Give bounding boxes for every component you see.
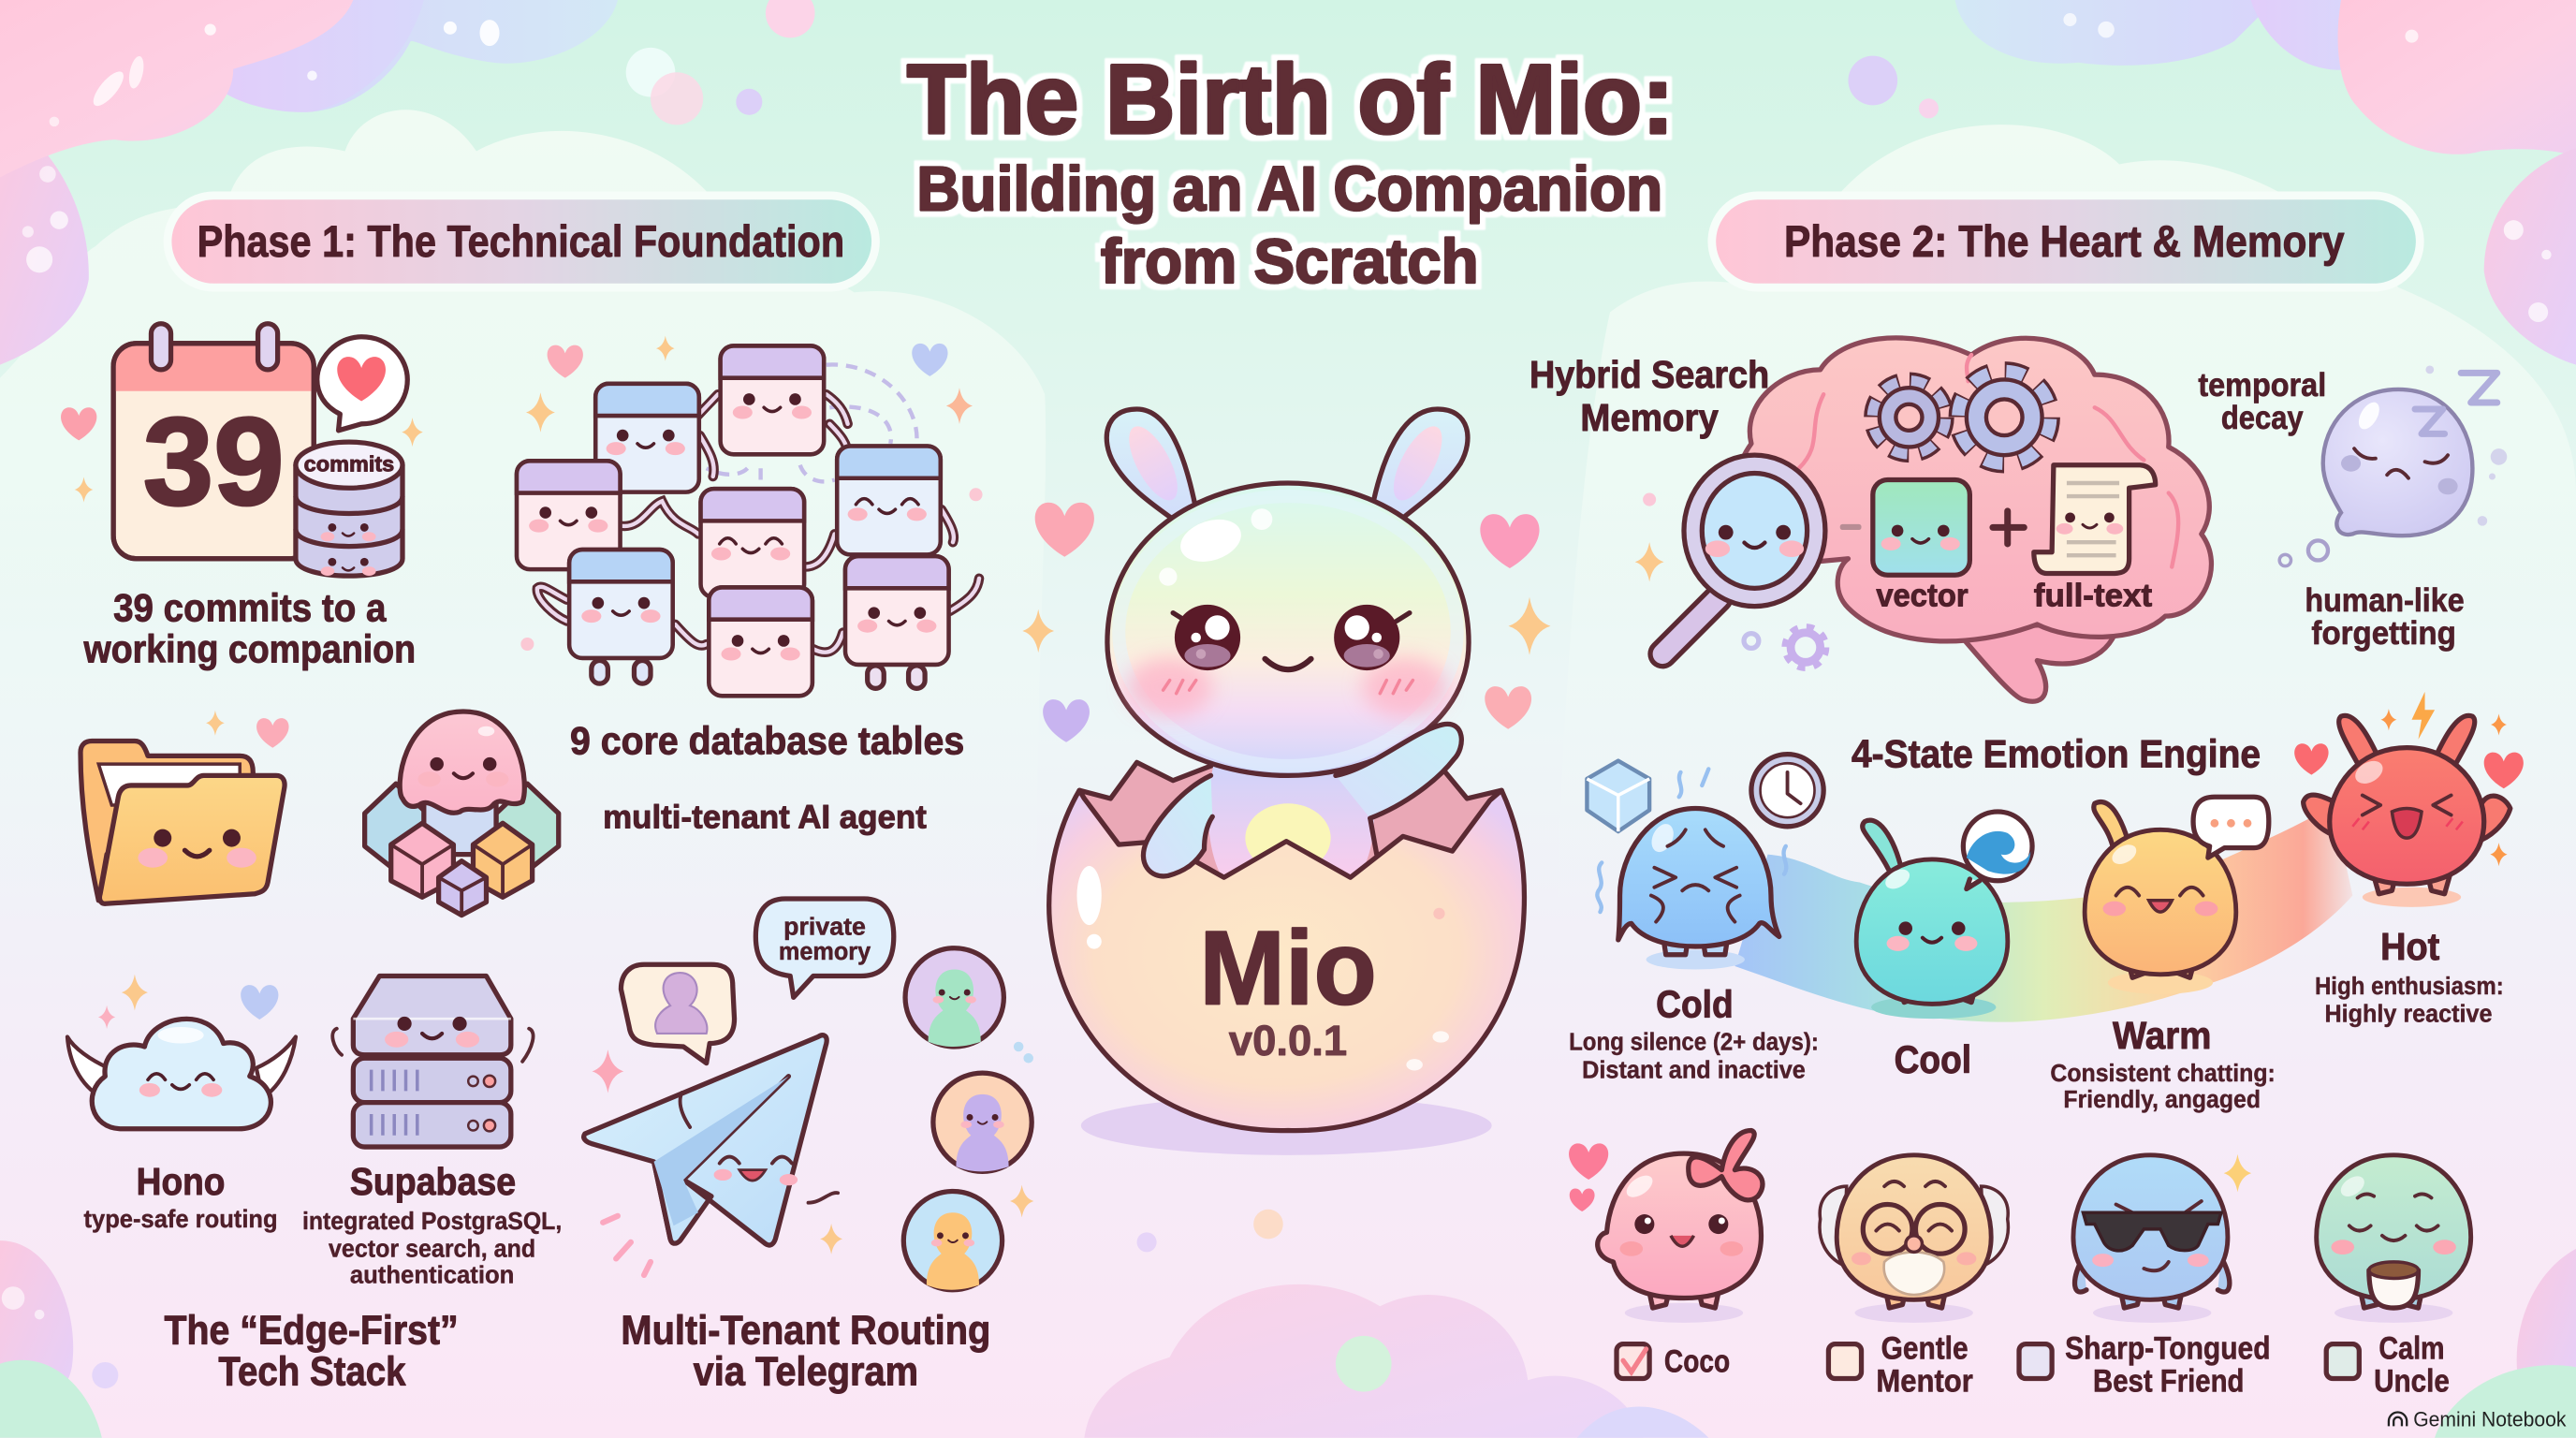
icon: brain [1735, 338, 2211, 701]
title: Building an AI Companion [916, 155, 1662, 225]
avatar: orange user [903, 1191, 1003, 1290]
icon: user bubble [621, 964, 735, 1064]
icon: gears [1873, 372, 2050, 463]
egg name label: Mio [1199, 908, 1377, 1026]
table characters [517, 345, 979, 696]
heading: Hybrid Search [1530, 353, 1769, 396]
decorative bubbles near title [626, 0, 1939, 125]
phase 2 heading pill [1712, 196, 2420, 287]
icon: scroll [2034, 465, 2156, 574]
character: warm [2085, 802, 2236, 994]
persona: gentle mentor [1820, 1155, 2008, 1323]
cold label: Cold [1656, 982, 1734, 1025]
background: top-left clouds [0, 0, 618, 365]
egg highlights [1076, 866, 1449, 1070]
temporal decay label: temporal [2198, 367, 2326, 404]
heading [1530, 353, 1769, 439]
warm label: Friendly, angaged [2063, 1085, 2261, 1113]
character: cold [1618, 809, 1779, 970]
heading: 4-State Emotion Engine [1852, 732, 2261, 776]
panel: 39 commits [61, 324, 423, 670]
private memory bubble [755, 899, 894, 997]
Edge-First heading: The “Edge-First” [165, 1308, 459, 1354]
Hono text [84, 1160, 278, 1233]
Supabase text: Supabase [350, 1160, 516, 1203]
persona labels with checkboxes: Mentor [1876, 1364, 1973, 1400]
hot label [2315, 925, 2504, 1028]
routing heading [621, 1308, 990, 1395]
hearts and sparkles around hero [1022, 503, 1550, 742]
routing heading: via Telegram [694, 1349, 918, 1395]
phase 2 heading pill: Phase 2: The Heart & Memory [1784, 217, 2345, 267]
persona: Coco [1569, 1131, 1763, 1323]
persona labels with checkboxes: Best Friend [2093, 1364, 2244, 1400]
routing heading: Multi-Tenant Routing [621, 1308, 990, 1354]
plus sign [1993, 511, 2024, 544]
head [1107, 483, 1469, 775]
phase 1 heading pill [168, 196, 875, 287]
icon: server Supabase [332, 976, 534, 1147]
Hono text: type-safe routing [84, 1204, 278, 1233]
title [907, 45, 1674, 297]
Supabase text: vector search, and [329, 1235, 535, 1263]
caption [83, 585, 416, 670]
Gemini Notebook watermark: Gemini Notebook [2413, 1407, 2567, 1431]
minus sign [1840, 524, 1862, 530]
character: cool [1856, 820, 2008, 1019]
icon: vector square [1873, 479, 1969, 575]
egg back shell [1079, 762, 1501, 888]
decorative gear, ring and sparkle [1635, 493, 1825, 668]
Edge-First heading: Tech Stack [218, 1349, 406, 1395]
warm label [2050, 1014, 2276, 1113]
heading: Memory [1580, 396, 1719, 439]
egg front shell [1049, 790, 1524, 1131]
icon: ice cube [1587, 761, 1649, 831]
forgetting label [2305, 582, 2465, 652]
warm label: Warm [2113, 1014, 2211, 1057]
phase 1 heading pill: Phase 1: The Technical Foundation [198, 217, 844, 267]
title: The Birth of Mio: [907, 45, 1674, 154]
icon: paper plane [584, 1035, 838, 1245]
persona labels with checkboxes: Sharp-Tongued [2065, 1330, 2271, 1366]
decorative hearts and sparkles [520, 336, 983, 651]
private memory bubble: memory [779, 937, 871, 965]
hot label: High enthusiasm: [2315, 972, 2504, 1000]
persona labels with checkboxes: Calm [2378, 1330, 2445, 1366]
hot accents [2294, 692, 2524, 866]
icon: calendar [113, 324, 314, 559]
persona labels with checkboxes: Coco [1664, 1344, 1730, 1380]
Supabase text: integrated PostgraSQL, [302, 1207, 562, 1235]
persona: sharp-tongued best friend [2073, 1154, 2251, 1323]
search labels [1876, 579, 2152, 614]
search labels: vector [1876, 579, 1969, 614]
icon: magnifier [1662, 455, 1825, 654]
icon: winged cloud Hono [67, 975, 296, 1129]
decorative hearts and sparkles [61, 407, 423, 503]
decorative sparkles and dashes [593, 1042, 1033, 1275]
warm label: Consistent chatting: [2050, 1059, 2276, 1087]
private memory bubble: private [783, 913, 866, 941]
multi-tenant label: multi-tenant AI agent [603, 800, 927, 836]
heading text: 9 core database tables [570, 719, 964, 763]
temporal decay label [2198, 367, 2326, 436]
icon: wave bubble [1963, 812, 2032, 889]
Edge-First heading [165, 1308, 459, 1395]
Hono text: Hono [137, 1160, 225, 1203]
dashed relations [707, 364, 917, 509]
cold label [1569, 982, 1819, 1083]
forgetting label: human-like [2305, 582, 2465, 619]
search labels: full-text [2034, 579, 2152, 614]
icon: clock [1751, 755, 1823, 827]
icon: sleepy bubble [2279, 366, 2507, 566]
caption: 39 commits to a [113, 585, 387, 629]
panel: database tables [517, 336, 983, 763]
avatar: purple user [933, 1073, 1032, 1171]
panel: 4-state emotion engine [1569, 692, 2524, 1113]
hot label: Highly reactive [2324, 1000, 2492, 1028]
egg shadow [1081, 1096, 1492, 1155]
background: bottom clouds [0, 1210, 2576, 1438]
icon: heart bubble [317, 337, 407, 431]
background: top-right clouds [1955, 0, 2576, 365]
icon: jelly on cubes [365, 712, 559, 916]
panel: hybrid search memory [1530, 338, 2507, 701]
egg name label: v0.0.1 [1229, 1017, 1347, 1064]
title: from Scratch [1101, 227, 1479, 297]
caption: working companion [83, 626, 416, 670]
Supabase text [302, 1160, 562, 1289]
shiver marks [1597, 769, 1786, 912]
body [1208, 756, 1377, 881]
persona labels with checkboxes: Uncle [2374, 1364, 2450, 1400]
panel: multi-tenant routing [584, 899, 1033, 1395]
character: hot [2304, 715, 2510, 907]
cold label: Distant and inactive [1582, 1055, 1806, 1083]
panel: tech stack [67, 975, 562, 1395]
icon: folder [80, 711, 289, 903]
icon: speech bubble dots [2193, 797, 2269, 858]
cold label: Long silence (2+ days): [1569, 1028, 1819, 1056]
persona labels with checkboxes [1617, 1330, 2450, 1400]
panel: personas [1569, 1131, 2471, 1400]
persona: calm uncle [2317, 1155, 2471, 1323]
avatar: green user [905, 948, 1003, 1047]
icon: database commits: commits [304, 452, 394, 477]
icon: calendar: 39 [143, 392, 285, 532]
hot label: Hot [2380, 925, 2439, 968]
eyes and smile [1173, 605, 1410, 670]
left arm [1143, 775, 1212, 876]
icon: database commits [296, 442, 402, 576]
ears [1106, 409, 1468, 520]
cool label: Cool [1895, 1037, 1971, 1081]
forgetting label: forgetting [2311, 615, 2456, 652]
persona labels with checkboxes: Gentle [1881, 1330, 1969, 1366]
Supabase text: authentication [350, 1261, 514, 1289]
hero: Mio hatching from egg [1022, 409, 1550, 1155]
rainbow band [1734, 805, 2352, 1022]
right arm [1336, 724, 1461, 818]
temporal decay label: decay [2221, 400, 2304, 436]
